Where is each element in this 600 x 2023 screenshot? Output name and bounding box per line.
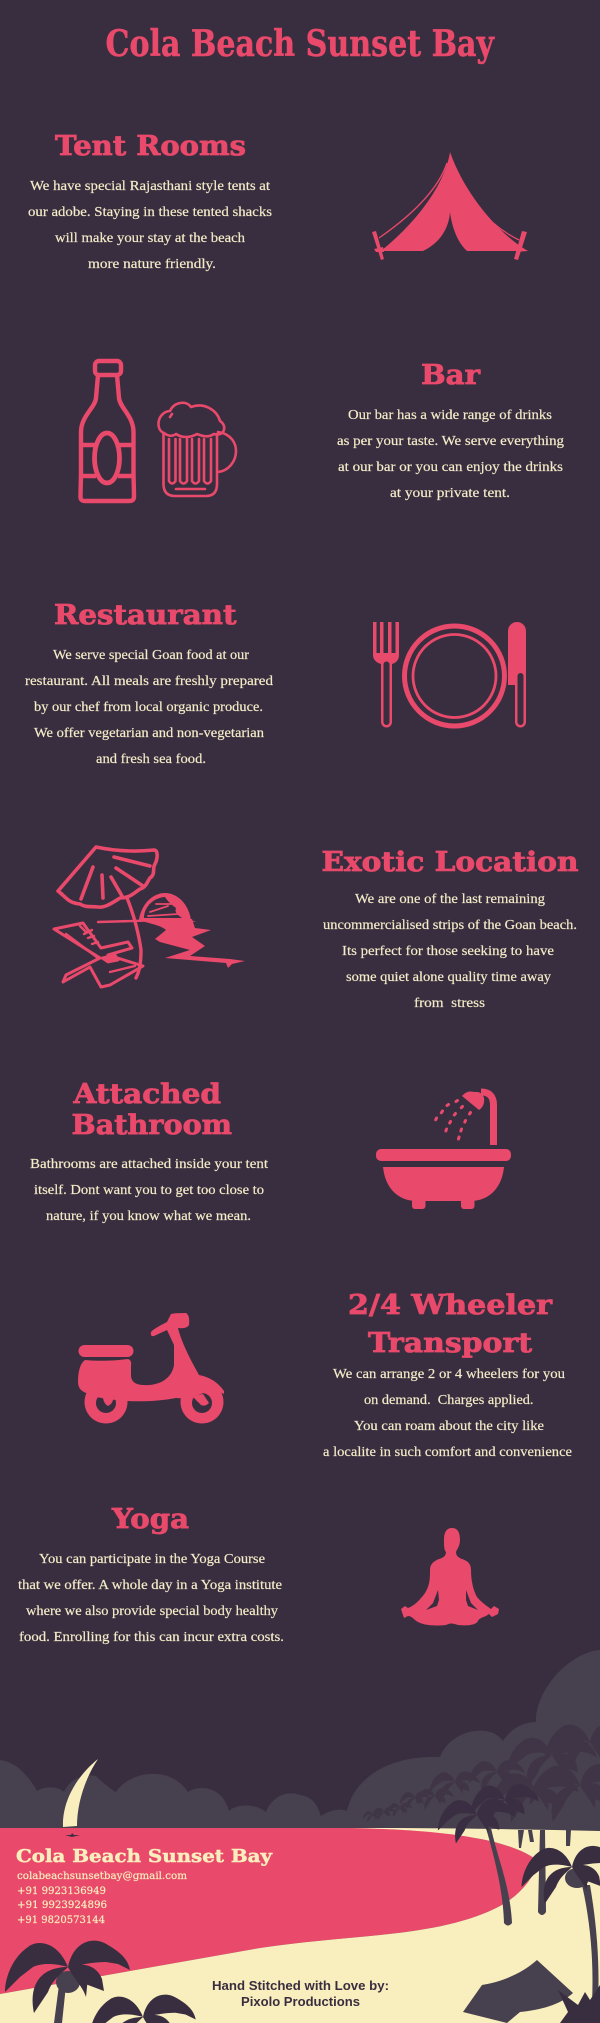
text block: bar: at our bar or you can enjoy the drinks xyxy=(338,459,563,474)
small boat xyxy=(65,1833,80,1837)
credit: Hand Stitched with Love by: xyxy=(212,1978,389,1993)
right palm xyxy=(522,1846,600,2003)
beach tent xyxy=(463,1960,573,2023)
title: Cola Beach Sunset Bay xyxy=(106,23,495,65)
clouds xyxy=(0,1650,600,1840)
text block: 2/4 wheeler transport: You can roam about the city like xyxy=(354,1418,544,1433)
credit xyxy=(212,1978,389,2009)
text block: tent rooms: our adobe. Staying in these tented shacks xyxy=(28,204,272,219)
grass tuft xyxy=(558,1985,600,2023)
icon: beer mug xyxy=(158,403,236,496)
text block: tent rooms xyxy=(28,178,272,271)
text block: restaurant: restaurant. All meals are freshly prepared xyxy=(25,673,273,688)
text block: bar: as per your taste. We serve everything xyxy=(337,433,564,448)
text block: restaurant: and fresh sea food. xyxy=(96,751,206,766)
text block: tent rooms: more nature friendly. xyxy=(88,256,216,271)
text block: exotic location xyxy=(323,891,577,1010)
heading: bar: Bar xyxy=(421,359,481,391)
heading: 2/4 wheeler transport: 2/4 Wheeler xyxy=(348,1289,553,1321)
heading: 2/4 wheeler transport xyxy=(348,1289,553,1359)
text block: bar: Our bar has a wide range of drinks xyxy=(348,407,552,422)
icon: meditating figure xyxy=(401,1528,499,1625)
sand xyxy=(0,1828,600,2023)
text block: yoga xyxy=(18,1551,284,1644)
text block: yoga: You can participate in the Yoga Course xyxy=(39,1551,265,1566)
text block: exotic location: some quiet alone quality time away xyxy=(346,969,551,984)
contact details xyxy=(16,1846,273,1926)
heading: attached bathroom xyxy=(72,1078,232,1141)
text block: attached bathroom: Bathrooms are attached inside your tent xyxy=(30,1156,268,1171)
icon: beer bottle xyxy=(80,361,134,501)
text block: attached bathroom: itself. Dont want you to get too close to xyxy=(34,1182,264,1197)
left palms xyxy=(5,1941,196,2023)
text block: restaurant: We offer vegetarian and non-vegetarian xyxy=(34,725,264,740)
contact details: +91 9923924896 xyxy=(17,1899,107,1911)
text block: 2/4 wheeler transport: a localite in such comfort and convenience xyxy=(323,1444,572,1459)
contact details: Cola Beach Sunset Bay xyxy=(16,1846,273,1867)
text block: exotic location: uncommercialised strips of the Goan beach. xyxy=(323,917,577,932)
far palms xyxy=(363,1723,600,1822)
heading: tent rooms: Tent Rooms xyxy=(55,130,246,162)
text block: exotic location: from stress xyxy=(414,995,485,1010)
icon: beach umbrella and sunset xyxy=(54,847,245,987)
credit: Pixolo Productions xyxy=(241,1994,360,2009)
text block: yoga: that we offer. A whole day in a Yoga institute xyxy=(18,1577,282,1592)
text block: 2/4 wheeler transport: We can arrange 2 or 4 wheelers for you xyxy=(333,1366,565,1381)
icon: tent xyxy=(372,152,528,260)
text block: yoga: where we also provide special body healthy xyxy=(26,1603,278,1618)
text block: 2/4 wheeler transport: on demand. Charges applied. xyxy=(364,1392,534,1407)
icon: plate xyxy=(404,626,504,726)
heading: attached bathroom: Bathroom xyxy=(72,1109,232,1141)
panel: tent rooms xyxy=(28,130,528,271)
panel: yoga xyxy=(18,1503,499,1644)
panel: bar xyxy=(80,359,564,501)
far palm trunks xyxy=(518,1830,571,1915)
heading: attached bathroom: Attached xyxy=(72,1078,221,1110)
icon: scooter xyxy=(78,1313,224,1424)
text block: tent rooms: will make your stay at the beach xyxy=(55,230,245,245)
contact details: +91 9820573144 xyxy=(17,1914,105,1926)
text block: restaurant xyxy=(25,647,273,766)
mid palm xyxy=(438,1784,539,1926)
text block: restaurant: We serve special Goan food at our xyxy=(53,647,249,662)
contact details: colabeachsunsetbay@gmail.com xyxy=(17,1870,187,1882)
text block: bar: at your private tent. xyxy=(390,485,510,500)
contact details: +91 9923136949 xyxy=(17,1885,106,1897)
panel: restaurant xyxy=(25,599,526,766)
text block: attached bathroom: nature, if you know what we mean. xyxy=(46,1208,251,1223)
text block: bar xyxy=(337,407,564,500)
icon: fork xyxy=(373,622,399,728)
panel: attached bathroom xyxy=(30,1078,511,1223)
panel: exotic location xyxy=(54,846,578,1010)
sailboat moon xyxy=(63,1759,98,1827)
icon: bathtub with shower xyxy=(376,1092,511,1209)
heading: 2/4 wheeler transport: Transport xyxy=(368,1327,532,1359)
text block: exotic location: Its perfect for those seeking to have xyxy=(342,943,554,958)
heading: yoga: Yoga xyxy=(111,1503,189,1535)
water xyxy=(0,1828,539,1994)
text block: 2/4 wheeler transport xyxy=(323,1366,572,1459)
heading: exotic location: Exotic Location xyxy=(322,846,578,878)
text block: tent rooms: We have special Rajasthani style tents at xyxy=(30,178,270,193)
text block: exotic location: We are one of the last remaining xyxy=(355,891,545,906)
footer scene xyxy=(0,1650,600,2023)
text block: yoga: food. Enrolling for this can incur extra costs. xyxy=(19,1629,284,1644)
heading: restaurant: Restaurant xyxy=(54,599,237,631)
icon: knife xyxy=(508,622,526,728)
panel: 2/4 wheeler transport xyxy=(78,1289,572,1459)
text block: attached bathroom xyxy=(30,1156,268,1223)
text block: restaurant: by our chef from local organic produce. xyxy=(34,699,263,714)
